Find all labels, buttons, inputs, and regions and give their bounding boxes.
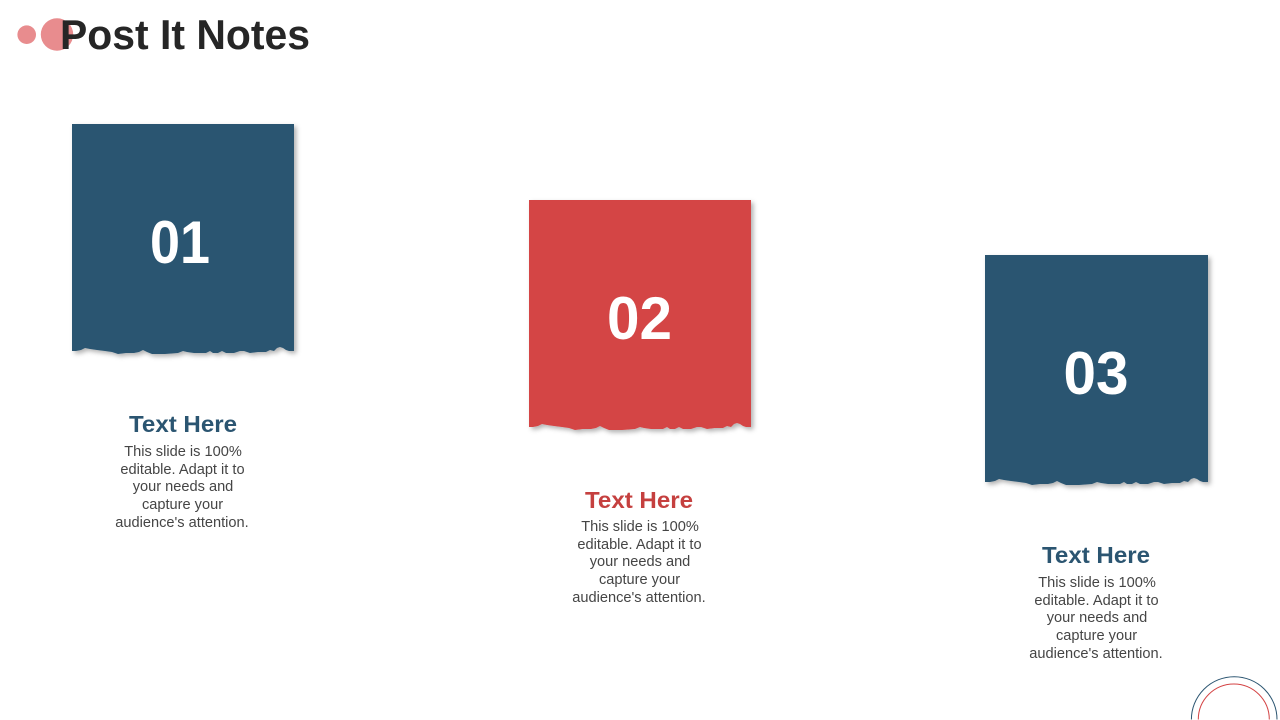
note 03 torn paper <box>985 255 1208 485</box>
title: Post It Notes <box>60 11 310 58</box>
decoration: concentric arcs bottom right <box>1191 677 1277 720</box>
heading: note 03: Text Here <box>1042 542 1150 568</box>
text block: note 01: This slide is 100% <box>124 444 242 460</box>
text block: note 03: editable. Adapt it to <box>1034 593 1159 609</box>
panel: note 03 <box>985 255 1208 662</box>
text block: note 02: capture your <box>599 572 680 588</box>
text block: note 03: This slide is 100% <box>1038 575 1156 591</box>
title decoration: pink circles <box>17 18 73 51</box>
text block: note 01: your needs and <box>133 479 233 495</box>
number 02: 02 <box>607 285 672 352</box>
text block: note 01: editable. Adapt it to <box>120 462 245 478</box>
text block: note 02: audience's attention. <box>572 590 706 606</box>
heading: note 01: Text Here <box>129 411 237 437</box>
text block: note 02: your needs and <box>590 554 690 570</box>
note 02 torn paper <box>529 200 751 430</box>
panel: note 01 <box>72 124 294 531</box>
text block: note 03: audience's attention. <box>1029 646 1163 662</box>
text block: note 02: This slide is 100% <box>581 519 699 535</box>
text block: note 01: capture your <box>142 497 223 513</box>
text block: note 03: your needs and <box>1047 610 1147 626</box>
number 03: 03 <box>1064 340 1128 407</box>
text block: note 01: audience's attention. <box>115 515 249 531</box>
number 01: 01 <box>150 209 210 276</box>
panel: note 02 <box>529 200 751 606</box>
note 01 torn paper <box>72 124 294 354</box>
heading: note 02: Text Here <box>585 487 693 513</box>
text block: note 03: capture your <box>1056 628 1137 644</box>
text block: note 02: editable. Adapt it to <box>577 537 702 553</box>
